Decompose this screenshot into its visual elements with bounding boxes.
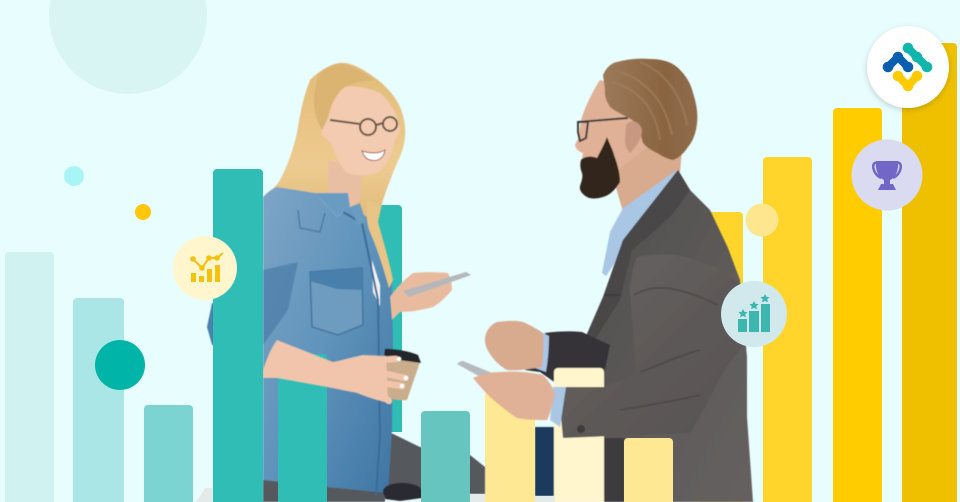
woman: neck <box>328 160 362 207</box>
man: beard <box>580 137 620 198</box>
man: ear <box>625 121 642 153</box>
logo badge <box>867 26 949 108</box>
man: trousers <box>535 427 556 496</box>
man: upper hand <box>485 321 543 370</box>
man: cuff button <box>577 425 585 433</box>
man: jacket lower dark panel <box>604 438 624 502</box>
man: jacket body <box>575 170 753 502</box>
woman: cup lid <box>384 349 421 363</box>
woman: shoulder seam <box>298 210 325 232</box>
woman: hair back <box>267 63 405 235</box>
man: glasses <box>578 118 628 141</box>
woman: arm behind <box>207 303 225 345</box>
man: back cuff <box>535 333 549 372</box>
man: hair strands <box>612 62 687 140</box>
woman: cup sleeve <box>383 355 420 400</box>
woman: right hand <box>390 272 452 320</box>
accent circle: teal <box>95 340 145 390</box>
logo: blue chevron <box>883 52 913 72</box>
person: man <box>457 59 753 502</box>
man: sleeve folds <box>620 288 718 410</box>
bar chart: front teal tall bar <box>213 169 263 502</box>
bar: light yellow, behind lower hand <box>485 392 535 502</box>
woman: pocket flap <box>310 268 362 290</box>
man: arm sleeve <box>558 254 748 438</box>
woman: lid on floor <box>383 483 422 501</box>
man: hair <box>603 59 697 160</box>
bar chart: front yellow bar <box>624 438 673 502</box>
man: shirt collar <box>602 170 680 276</box>
woman: shirt placket <box>343 212 380 495</box>
woman: trousers <box>263 427 485 502</box>
icon: growth chart badge <box>173 236 237 300</box>
icon: trophy badge <box>852 140 922 210</box>
woman: lower sleeve shade <box>263 262 298 345</box>
woman: shirt opening <box>372 260 380 306</box>
woman: denim shirt <box>263 187 393 493</box>
bar chart: front muted teal bar <box>421 411 470 502</box>
man: neck <box>612 135 682 212</box>
bar chart: teal bar over shirt <box>278 354 327 502</box>
woman: face <box>322 86 400 175</box>
man: lapel <box>577 170 690 357</box>
man: lower hand <box>473 372 555 420</box>
woman: forearm and cup <box>263 272 471 501</box>
woman: hair top strand <box>314 63 374 130</box>
woman: collar <box>315 193 366 225</box>
woman: fingernails <box>397 357 408 388</box>
logo: teal stroke <box>903 43 932 72</box>
logo: yellow chevron <box>893 71 922 91</box>
accent circle: pale yellow <box>746 204 778 236</box>
icon: stars and bars badge <box>721 281 787 347</box>
man: face <box>575 80 650 185</box>
person: woman <box>207 63 485 502</box>
woman: smile <box>362 150 385 161</box>
woman: phone <box>403 272 471 297</box>
decorative circles <box>49 0 207 220</box>
woman: forearm <box>263 340 390 403</box>
man: chest pocket <box>604 294 620 296</box>
woman: front hair strand <box>367 200 393 288</box>
woman: glasses <box>330 117 397 135</box>
woman: pocket <box>310 268 363 335</box>
bar: pale yellow tall <box>554 368 604 502</box>
man: front cuff <box>550 387 566 427</box>
man: phone <box>457 361 492 379</box>
woman: fingers <box>380 359 405 401</box>
man: sleeve behind <box>525 331 610 395</box>
floor <box>196 488 555 502</box>
